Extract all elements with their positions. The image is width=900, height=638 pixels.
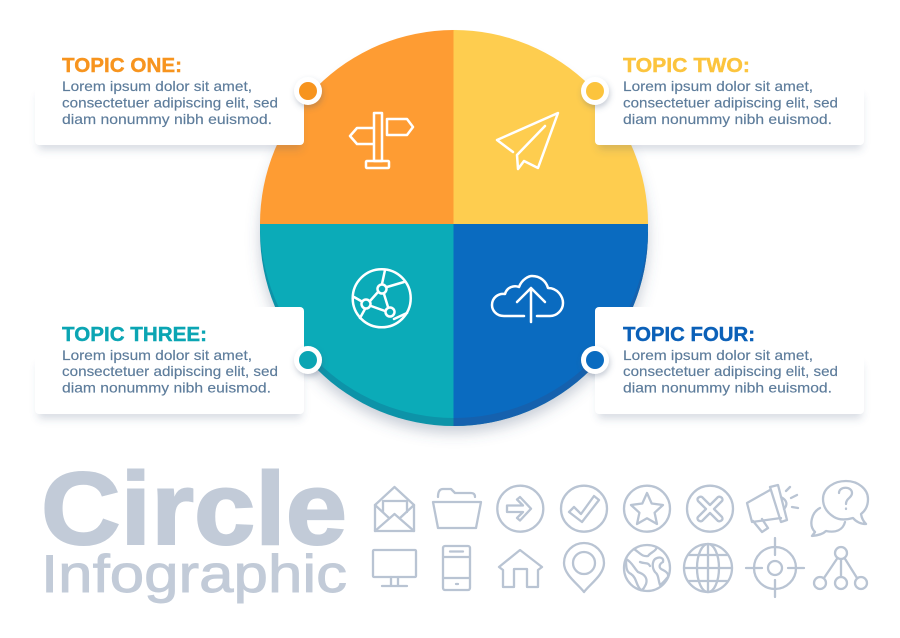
panel: topic four [595, 307, 864, 414]
text block: topic two [623, 78, 838, 127]
text block: topic four: diam nonummy nibh euismod. [623, 380, 832, 396]
panel: four-part circle [260, 30, 648, 426]
heading: topic two: TOPIC TWO: [623, 55, 750, 77]
text block: topic one: Lorem ipsum dolor sit amet, [62, 78, 252, 94]
icon: smartphone [443, 546, 470, 590]
heading: topic four: TOPIC FOUR: [623, 324, 755, 346]
icon: question speech bubbles [811, 481, 868, 536]
icon: megaphone [747, 485, 798, 532]
text block: topic two: diam nonummy nibh euismod. [623, 111, 832, 127]
text block: topic four [623, 347, 838, 396]
title: Circle: Circle [41, 451, 347, 566]
marker: orange dot [294, 77, 322, 105]
text block: topic two: consectetuer adipiscing elit, sed [623, 94, 838, 110]
heading: topic one: TOPIC ONE: [62, 55, 182, 77]
icon: folder [433, 489, 481, 528]
segment: teal quadrant [260, 224, 454, 418]
icon: signpost [350, 113, 413, 168]
panel: topic one [35, 38, 304, 145]
icon: open envelope [375, 487, 414, 531]
text block: topic three: diam nonummy nibh euismod. [62, 380, 271, 396]
icon: cross circle [687, 486, 733, 532]
text block: topic three [62, 347, 278, 396]
icon: star circle [624, 486, 670, 532]
icon: cloud upload [492, 276, 563, 322]
text block: topic one: consectetuer adipiscing elit, sed [62, 94, 278, 110]
icon: location pin [564, 543, 604, 592]
title: Infographic: Infographic [41, 545, 347, 604]
icon: target [746, 538, 804, 597]
text block: topic four: consectetuer adipiscing elit, sed [623, 363, 838, 379]
segment: blue quadrant [454, 224, 648, 418]
panel: topic three [35, 307, 304, 414]
icon: paper plane [497, 113, 558, 169]
text block: topic one: diam nonummy nibh euismod. [62, 111, 272, 127]
heading: topic three: TOPIC THREE: [62, 324, 207, 346]
marker: blue dot [581, 346, 609, 374]
panel: topic two [595, 38, 864, 145]
segment: orange quadrant [260, 30, 454, 224]
segment: yellow quadrant [454, 30, 648, 224]
text block: topic one [62, 78, 278, 127]
icon: monitor [373, 550, 416, 586]
marker: teal dot [294, 346, 322, 374]
text block: topic four: Lorem ipsum dolor sit amet, [623, 347, 813, 363]
text block: topic three: Lorem ipsum dolor sit amet, [62, 347, 252, 363]
icon: arrow circle [497, 486, 543, 532]
icon: hierarchy network [814, 547, 867, 589]
icon: earth [624, 545, 670, 591]
text block: topic three: consectetuer adipiscing elit, sed [62, 363, 278, 379]
text block: topic two: Lorem ipsum dolor sit amet, [623, 78, 813, 94]
icon: globe [684, 544, 732, 592]
icon: check circle [561, 486, 607, 532]
marker: yellow dot [581, 77, 609, 105]
icon: house [499, 550, 542, 587]
icon: network globe [353, 269, 411, 327]
